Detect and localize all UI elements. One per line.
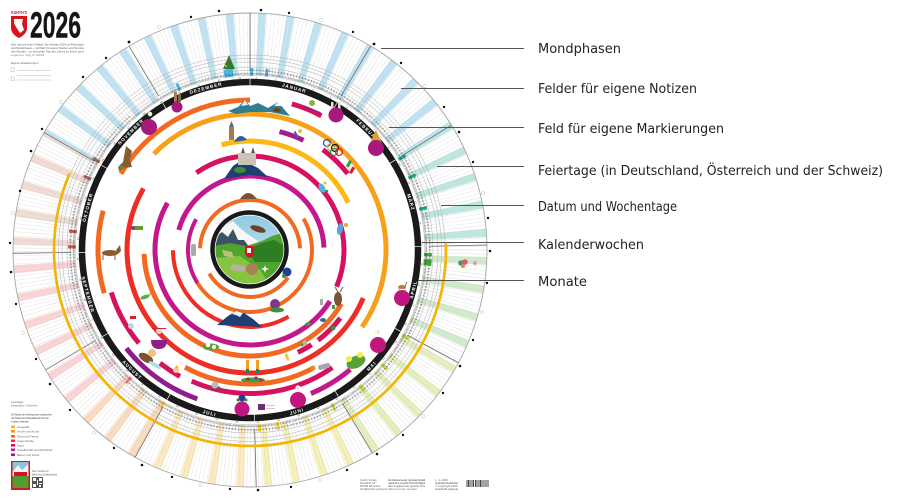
icon: daisy above may circle (376, 330, 380, 334)
imprint: erstellt. Eine Gewähr für die Richtigkeit (388, 481, 425, 485)
event circles (141, 102, 410, 416)
central alpine disc (210, 210, 288, 288)
intro text: und Mondphasen – mit Platz für eigene Notizen und Termine (11, 46, 84, 50)
icon: red flowers (241, 376, 265, 382)
outer circle (13, 13, 487, 487)
callout labels (538, 41, 883, 290)
icon: people and balls in april field (458, 259, 477, 268)
icon: skier purple (294, 129, 302, 138)
illustrations (102, 55, 477, 410)
imprint: www.kunth-verlag.de (435, 487, 458, 491)
imprint: aller Angaben kann jedoch nicht (388, 484, 425, 488)
legend swatches: Sport (17, 444, 24, 448)
dates: 01020304050607080910111213141516171819202122232425262728293031010203040506070809101112131415161718192021222324252627280102030405060708091011121314151617181920212223242526272829303101020304050607080910111213141516171819202122232425262728293001020304050607080910111213141516171819202122232425262728293031010203040506070809101112131415161718192021222324252627282930010203040506070809101112131415161718192021222324252627282930310102030405060708091011121314151617181920212223242526272829303101020304050607080910111213141516171819202122232425262728293001020304050607080910111213141516171819202122232425262728293031010203040506070809101112131415161718192021222324252627282930010203040506070809101112131415161718192021222324252627282930 (72, 72, 428, 428)
weekend bands coloured by season (44, 44, 456, 456)
barcode (466, 478, 490, 489)
imprint: Kunth Verlag (360, 478, 377, 482)
callout labels: Monate (538, 274, 587, 290)
imprint: übernommen werden. (388, 487, 418, 491)
icon: italian flag (346, 160, 355, 174)
icon: deer right (332, 287, 343, 309)
icon: cyclist with flags (128, 316, 136, 329)
legend swatches: Gesellschaft und Wirtschaft (17, 448, 52, 452)
intro text: Hier, wie auf einem Tablett: Die Monate 2026 mit Feiertagen (11, 42, 84, 46)
moon phase markers (9, 9, 491, 491)
month names: SEPTEMBER (80, 276, 95, 313)
icon: flower above november circle (148, 112, 152, 116)
month names: AUGUST (121, 359, 143, 381)
calendar weeks: 1 2 3 4 5 6 7 8 9 10 11 12 13 14 15 16 17 18 19 20 21 22 23 24 25 26 27 28 29 30 31 32 33 34 35 36 37 38 39 40 41 42 43 44 45 46 47 48 49 50 51 52 53 (77, 77, 424, 423)
imprint: 1. 1. 2026 (435, 478, 448, 482)
icon: towers above december circle (174, 92, 181, 102)
icon: grey animal with orange (310, 363, 331, 370)
icon: daisy above june circle (296, 386, 300, 390)
icon: climbers on pink (300, 340, 308, 346)
icon: hikers (246, 360, 259, 374)
icon: purple flowers (270, 299, 284, 312)
legend block: Feiertage (11, 400, 24, 404)
imprint: © Copyright 2026 (435, 484, 458, 488)
callout labels: Mondphasen (538, 41, 621, 57)
icon: gentian (236, 394, 248, 402)
icon: navy mountain bottom (217, 311, 262, 327)
year: 2026 (30, 4, 81, 46)
month names: FEBRUAR (355, 118, 380, 142)
icon: rider (173, 366, 179, 373)
icon: ibex above april circle (398, 282, 407, 291)
icon: brown rock (240, 193, 257, 199)
callout labels: Kalenderwochen (538, 237, 644, 253)
imprint: Postfach 16 (360, 481, 376, 485)
icon: castle with dark mountain (224, 147, 268, 179)
legend swatches (11, 425, 52, 457)
intro text: eigenen Tag in 2026 (11, 53, 44, 57)
imprint (360, 478, 458, 491)
leader lines (381, 48, 524, 280)
icon: grey ibex (191, 244, 196, 256)
month names: DEZEMBER (189, 81, 223, 95)
month names: OKTOBER (81, 192, 94, 223)
month names: JANUAR (281, 82, 307, 94)
month names: MAI (366, 360, 377, 372)
legend swatches: Urgeschichte (17, 439, 34, 443)
legend swatches: Kirche und Kunst (17, 430, 39, 434)
holiday markers in date ring (68, 68, 432, 432)
icon: people above january circle (331, 102, 340, 109)
icon: green bird lower left (140, 293, 151, 301)
icon: tower and hill (229, 121, 247, 142)
icon: christmas tree (223, 55, 235, 73)
concentric guide rings (55, 55, 445, 445)
legend block: Mehr Info und Bestell-Link (32, 474, 58, 476)
icon: blue flower by inner ring (282, 268, 292, 278)
callout labels: Felder für eigene Notizen (538, 81, 697, 97)
icon: tiny folk figures (258, 404, 275, 410)
book cover (11, 461, 30, 490)
month ring (79, 79, 421, 421)
icon: yellow flowers (344, 352, 368, 372)
legend block: den Farben der Jahreskalender-Themen (11, 416, 49, 420)
icon: ibex brown top left (118, 146, 132, 171)
summer time arc (54, 54, 446, 446)
icon: blue bird 2 (336, 223, 348, 235)
title block (11, 4, 85, 80)
icon: green bird left (131, 226, 143, 230)
imprint: info@kunth-verlag.de (360, 487, 388, 491)
legend block: Das Handbuch (32, 470, 49, 473)
callout labels: Feld für eigene Markierungen (538, 121, 724, 137)
icon: cyclists (210, 382, 220, 390)
intro text: des Monats – so wird jeder Tag des Jahres zu Ihrem ganz (11, 50, 85, 54)
month names: NOVEMBER (117, 118, 145, 146)
month names: JULI (202, 409, 217, 417)
icon: rafters (137, 349, 162, 370)
imprint: 81369 München (360, 484, 381, 488)
month divider lines (13, 13, 487, 487)
own markings: Eigene Markierungen (11, 61, 39, 65)
legend block: Deutschland · Österreich (11, 404, 38, 408)
month names: APRIL (409, 280, 418, 299)
imprint: Gedruckt in Deutschland (435, 481, 458, 485)
weekdays: DFSSMDMDFSSMDMDFSSMDMDFSSMDMDFSSMDMDFSSMDMDFSSMDMDFSSMDMDFSSMDMDFSSMDMDFSSMDMDFSSMDMDFSSMDMDFSSMDMDFSSMDMDFSSMDMDFSSMDMDFSSMDMDFSSMDMDFSSMDMDFSSMDMDFSSMDMDFSSMDMDFSSMDMDFSSMDMDFSSMDMDFSSMDMDFSSMDMDFSSMDMDFSSMDMDFSSMDMDFSSMDMDFSSMDMDFSSMDMDFSSMDMDFSSMDMDFSSMDMDFSSMDMDFSSMDMDFSSMDMDFSSMDMDFSSMDMDFSSMDMDFSSMDMDFSSMDMDFSSMDMD (69, 69, 431, 431)
legend block (11, 400, 58, 490)
icon: olympic rings (324, 140, 342, 156)
icon: alpine panorama (228, 100, 290, 116)
intro text (11, 42, 85, 57)
calendar wheel outer rings (12, 12, 488, 488)
month names: JUNI (289, 407, 305, 416)
icon: deer brown left (102, 245, 121, 260)
legend block: Die Farben der Kreisegmente entsprechen (11, 412, 52, 416)
icon: paraglider small (284, 353, 290, 361)
icon: flag cross over september circle (152, 328, 166, 334)
legend swatches: Bauen und Kunst (17, 453, 39, 457)
QR code (32, 477, 43, 488)
legend block: in diesem Kalender: (11, 420, 29, 424)
icon: skier top (303, 100, 321, 113)
imprint: Der Kalender wurde mit grösster Sorgfalt (388, 478, 425, 482)
callout labels: Datum und Wochentage (538, 199, 677, 215)
legend swatches: Flora und Fauna (17, 434, 39, 438)
icon: birds on right arcs (305, 299, 336, 330)
icon: edelweiss group (203, 343, 219, 350)
month boundary ticks (79, 79, 421, 421)
logo: KUNTH'S (11, 10, 27, 15)
icon: blue bird 1 (317, 182, 328, 194)
daily grid lines (40, 40, 460, 460)
icon: golden cone (370, 130, 382, 143)
event arcs (92, 92, 408, 408)
legend swatches: Geografie (17, 425, 30, 429)
month names: MÄRZ (406, 193, 417, 211)
month names (80, 81, 418, 417)
